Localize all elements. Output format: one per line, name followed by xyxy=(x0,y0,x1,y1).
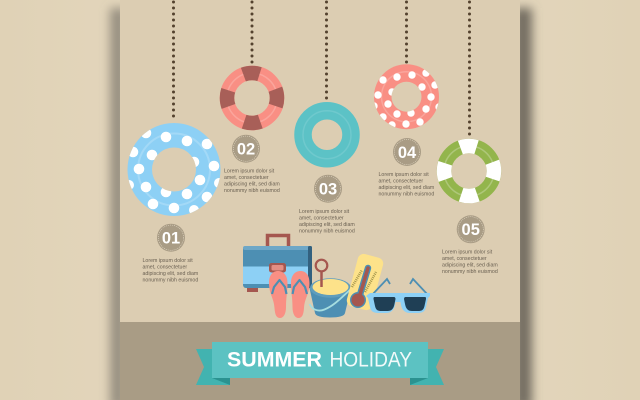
badge 01 xyxy=(157,224,185,252)
icon: flip flops xyxy=(269,271,310,318)
ribbon main band xyxy=(212,342,428,378)
ring 4: coral polka dot xyxy=(370,64,443,129)
text block 01: nonummy nibh euismod xyxy=(142,278,198,284)
badge 03 xyxy=(314,175,342,203)
ring 5: green with white bands xyxy=(444,146,494,196)
text block 03: nonummy nibh euismod xyxy=(299,228,355,234)
right ribbon tail xyxy=(410,349,444,385)
text block 03: adipiscing elit, sed diam xyxy=(299,222,355,228)
badge 03: 03 xyxy=(319,181,337,199)
badge 05 xyxy=(457,215,485,243)
text block 05: Lorem ipsum dolor sit xyxy=(442,250,493,256)
text block 01: Lorem ipsum dolor sit xyxy=(142,258,193,264)
panel: upper beige xyxy=(120,0,520,322)
title ribbon xyxy=(196,342,444,385)
left ribbon tail xyxy=(196,349,230,385)
text block 03: amet, consectetuer xyxy=(299,216,344,222)
panel: lower band xyxy=(120,322,520,400)
icon: sunglasses xyxy=(366,279,430,313)
ring 1: blue polka dot xyxy=(124,123,224,216)
badge 04: 04 xyxy=(398,144,417,162)
text block 04: Lorem ipsum dolor sit xyxy=(378,172,429,178)
icon: bucket and shovel xyxy=(310,260,351,318)
text block 05: nonummy nibh euismod xyxy=(442,269,498,275)
text block 04: nonummy nibh euismod xyxy=(378,192,434,198)
text block 02: adipiscing elit, sed diam xyxy=(224,182,280,188)
badge 04 xyxy=(393,138,421,166)
icon: suitcase xyxy=(243,236,312,292)
text block 01 xyxy=(142,258,199,284)
text block 03: Lorem ipsum dolor sit xyxy=(299,209,350,215)
ring 3: teal xyxy=(303,111,351,159)
text block 05: adipiscing elit, sed diam xyxy=(442,262,498,268)
text block 05: amet, consectetuer xyxy=(442,256,487,262)
text block 02: Lorem ipsum dolor sit xyxy=(224,168,275,174)
ring 2: salmon with dark bands xyxy=(227,73,277,123)
badge 01: 01 xyxy=(162,230,180,248)
badge 02 xyxy=(232,135,260,163)
text block 01: amet, consectetuer xyxy=(142,264,187,270)
text block 05 xyxy=(442,250,498,275)
left ribbon fold xyxy=(212,378,230,385)
text block 03 xyxy=(299,209,355,234)
text block 02: nonummy nibh euismod xyxy=(224,188,280,194)
title text: SUMMER xyxy=(227,349,322,372)
text block 01: adipiscing elit, sed diam xyxy=(142,271,199,277)
chains xyxy=(174,2,470,138)
text block 04 xyxy=(378,172,435,198)
icon: thermometer xyxy=(345,253,385,311)
text block 04: adipiscing elit, sed diam xyxy=(378,185,435,191)
badge 05: 05 xyxy=(462,221,480,239)
text block 02: amet, consectetuer xyxy=(224,175,269,181)
right ribbon fold xyxy=(410,378,428,385)
text block 04: amet, consectetuer xyxy=(378,178,423,184)
text block 02 xyxy=(224,168,280,194)
badge 02: 02 xyxy=(237,141,255,159)
title text: HOLIDAY xyxy=(330,349,412,372)
